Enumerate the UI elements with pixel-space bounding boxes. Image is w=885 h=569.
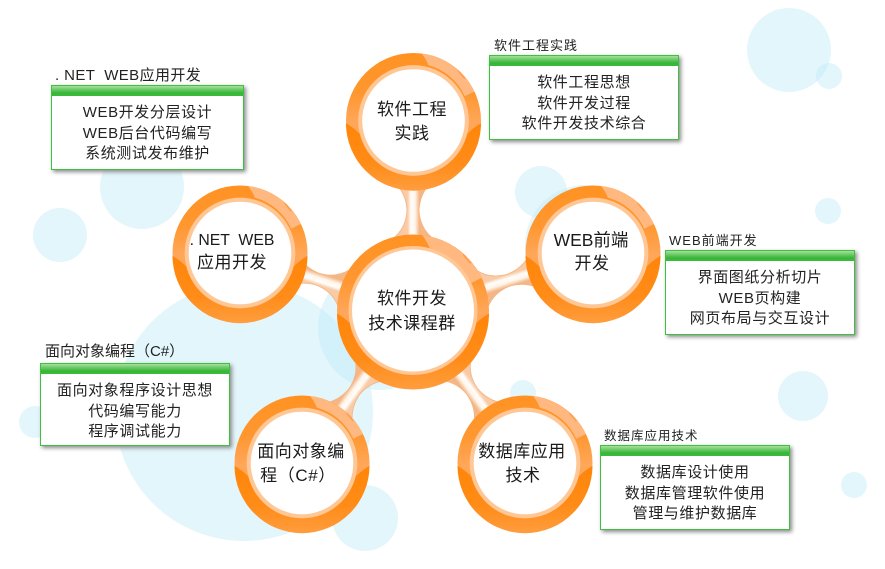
panel: 面向对象编程（C#）: 代码编写能力 <box>88 402 182 420</box>
node: 数据库应用技术: 数据库应用 <box>478 442 566 461</box>
node: WEB前端开发: WEB前端 <box>554 230 628 250</box>
node: 软件开发技术课程群: 软件开发 <box>377 289 447 308</box>
heading: 软件工程实践: 软件工程实践 <box>494 38 578 53</box>
heading: WEB前端开发: WEB前端开发 <box>669 233 758 248</box>
node: 面向对象编程（C#） <box>234 396 370 533</box>
heading: 数据库应用技术: 数据库应用技术 <box>604 429 699 443</box>
panel: 数据库应用技术: 数据库管理软件使用 <box>625 484 765 502</box>
panel: 软件工程实践: 软件工程思想 <box>537 74 631 91</box>
panel: WEB前端开发: 网页布局与交互设计 <box>690 310 830 327</box>
connectors between hub and topics <box>287 184 539 424</box>
panel: 数据库应用技术: 数据库设计使用 <box>640 464 750 481</box>
panel: .NET WEB应用开发: 系统测试发布维护 <box>85 145 210 162</box>
node: 软件工程实践: 实践 <box>394 124 430 143</box>
panel: 软件工程实践: 软件开发过程 <box>537 94 631 112</box>
panel: 面向对象编程（C#）: 程序调试能力 <box>88 423 182 440</box>
node: .NET WEB应用开发 <box>172 186 308 323</box>
panel: .NET WEB应用开发: WEB后台代码编写 <box>83 124 212 142</box>
heading: 面向对象编程（C#）: 面向对象编程（C#） <box>45 343 184 360</box>
panel: 软件工程实践: 软件开发技术综合 <box>522 115 646 132</box>
node: 软件工程实践 <box>346 53 481 191</box>
node: 面向对象编程（C#）: 程（C#） <box>260 466 336 485</box>
node: WEB前端开发 <box>526 186 660 323</box>
node: 面向对象编程（C#）: 面向对象编 <box>257 442 345 461</box>
panel: 面向对象编程（C#） <box>40 363 230 446</box>
node: 数据库应用技术: 技术 <box>506 466 540 485</box>
panel: 面向对象编程（C#）: 面向对象程序设计思想 <box>57 382 213 399</box>
panel: 软件工程实践 <box>489 55 679 140</box>
panel: 数据库应用技术: 管理与维护数据库 <box>633 505 757 522</box>
node: 数据库应用技术 <box>458 396 592 533</box>
panel: WEB前端开发: 界面图纸分析切片 <box>698 269 822 286</box>
node: .NET WEB应用开发: . NET WEB <box>190 232 274 249</box>
node: .NET WEB应用开发: 应用开发 <box>197 253 267 272</box>
panel: .NET WEB应用开发: WEB开发分层设计 <box>83 104 212 121</box>
node: 软件开发技术课程群 <box>337 234 489 390</box>
node: WEB前端开发: 开发 <box>574 254 610 273</box>
node: 软件工程实践: 软件工程 <box>377 100 447 119</box>
panel: WEB前端开发 <box>665 250 855 335</box>
node: 软件开发技术课程群: 技术课程群 <box>368 314 456 333</box>
panel: WEB前端开发: WEB页构建 <box>719 290 801 306</box>
panel: .NET WEB应用开发 <box>51 85 244 170</box>
heading: .NET WEB应用开发: . NET WEB应用开发 <box>55 67 201 84</box>
panel: 数据库应用技术 <box>600 445 790 530</box>
